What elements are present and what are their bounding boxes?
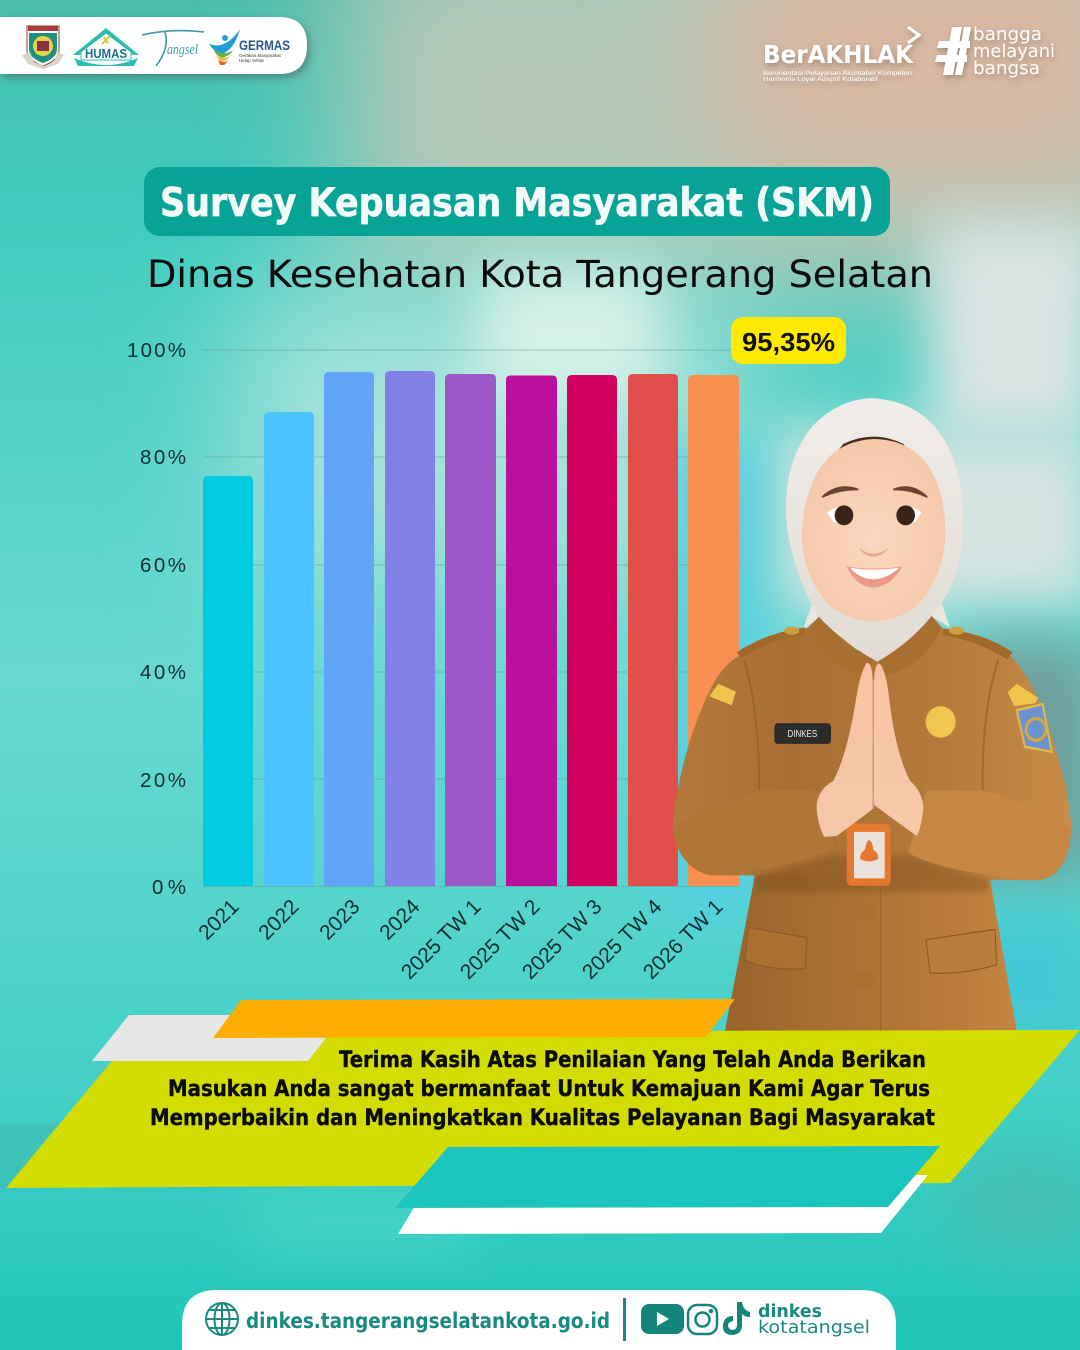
thank you message	[150, 1048, 935, 1131]
eyebrows	[822, 487, 927, 497]
y axis labels	[127, 339, 186, 899]
x axis labels: 2023	[315, 895, 365, 945]
collar	[808, 614, 942, 676]
name tag: DINKES	[787, 728, 817, 739]
y axis labels: 0%	[152, 876, 186, 899]
BerAKHLAK logo: BerAKHLAK	[763, 40, 914, 69]
thank you message: Memperbaikin dan Meningkatkan Kualitas Pelayanan Bagi Masyarakat	[150, 1106, 935, 1131]
x axis labels: 2024	[375, 895, 425, 945]
logo: Germas	[209, 29, 290, 65]
x axis labels: 2021	[194, 895, 244, 945]
title badge	[144, 167, 890, 236]
value callout: 95,35%	[742, 327, 835, 357]
character: health officer	[673, 398, 1071, 1031]
value callout	[731, 317, 846, 364]
gold pin	[926, 706, 956, 738]
social handle	[758, 1301, 870, 1338]
website: dinkes.tangerangselatankota.go.id	[246, 1309, 610, 1333]
hijab	[786, 398, 963, 662]
sleeve seams	[744, 660, 998, 790]
teal tab	[395, 1146, 940, 1208]
shadow under sleeves	[755, 855, 989, 892]
right cuff	[908, 790, 1071, 880]
pockets	[745, 927, 807, 969]
bangga melayani bangsa logo: bangsa	[973, 58, 1040, 79]
hijab tails	[803, 593, 950, 629]
bangga melayani bangsa logo: melayani	[973, 41, 1055, 62]
BerAKHLAK logo	[763, 27, 919, 83]
social handle: dinkes	[758, 1301, 822, 1322]
logo: Tangsel script	[142, 31, 204, 66]
coat buttons	[857, 902, 876, 921]
x axis labels: 2022	[254, 895, 304, 945]
thank you message: Terima Kasih Atas Penilaian Yang Telah Anda Berikan	[339, 1048, 926, 1073]
x axis labels: 2025 TW 4	[578, 895, 667, 984]
x axis labels	[194, 895, 728, 984]
logo: Humas: HUMAS	[85, 46, 127, 61]
x axis labels: 2025 TW 1	[397, 895, 486, 984]
name tag	[774, 723, 831, 744]
y axis gridlines	[203, 350, 740, 886]
bangga melayani bangsa logo: bangga	[973, 24, 1042, 45]
header logo bar	[0, 17, 307, 74]
face	[802, 437, 945, 621]
logo pill	[0, 17, 307, 74]
bar chart	[127, 339, 740, 984]
left cuff	[673, 790, 835, 875]
social handle: kotatangsel	[758, 1317, 870, 1338]
BerAKHLAK logo: Berorientasi Pelayanan Akuntabel Kompeten	[763, 71, 912, 77]
lime panel	[6, 1030, 1080, 1188]
footer bar	[182, 1290, 896, 1350]
logo: Tangsel shield	[22, 26, 64, 69]
eyes	[827, 507, 854, 523]
coat	[673, 627, 1071, 1031]
subtitle: Dinas Kesehatan Kota Tangerang Selatan	[147, 253, 933, 296]
white tab	[398, 1175, 928, 1234]
BerAKHLAK logo: Harmonis Loyal Adaptif Kolaboratif	[763, 77, 878, 83]
grey tab	[92, 1015, 326, 1061]
icon: globe	[206, 1303, 238, 1335]
epaulettes	[737, 627, 1013, 660]
title badge: Survey Kepuasan Masyarakat (SKM)	[160, 181, 874, 226]
yellow shoulder tabs	[709, 684, 1038, 706]
nose	[859, 548, 888, 557]
y axis labels: 60%	[140, 554, 186, 577]
x axis labels: 2025 TW 2	[456, 895, 545, 984]
sleeve patch	[1017, 704, 1052, 752]
coat placket	[879, 880, 882, 1031]
icon: tiktok	[723, 1302, 750, 1335]
hash mark	[935, 27, 971, 75]
bangga melayani bangsa logo	[935, 24, 1055, 79]
icon: youtube	[641, 1304, 684, 1334]
x axis labels: 2025 TW 3	[518, 895, 607, 984]
x axis labels: 2026 TW 1	[639, 895, 728, 984]
icon: instagram	[688, 1305, 717, 1334]
id card	[847, 824, 891, 886]
y axis labels: 100%	[127, 339, 186, 362]
y axis labels: 80%	[140, 446, 186, 469]
logo: Tangsel script: angsel	[167, 42, 198, 58]
y axis labels: 20%	[140, 769, 186, 792]
bars	[203, 371, 739, 886]
coat lower	[725, 875, 1017, 1031]
praying hands	[817, 663, 923, 837]
y axis labels: 40%	[140, 661, 186, 684]
orange tab	[213, 999, 735, 1038]
smile	[847, 566, 902, 587]
logo: Germas: Gerakan Masyarakat	[239, 53, 282, 58]
thank you message: Masukan Anda sangat bermanfaat Untuk Kemajuan Kami Agar Terus	[168, 1077, 930, 1102]
message banner	[6, 999, 1080, 1234]
logo: Germas: Hidup Sehat	[239, 58, 265, 63]
logo: Humas	[73, 28, 139, 66]
logo: Germas: GERMAS	[239, 38, 290, 53]
